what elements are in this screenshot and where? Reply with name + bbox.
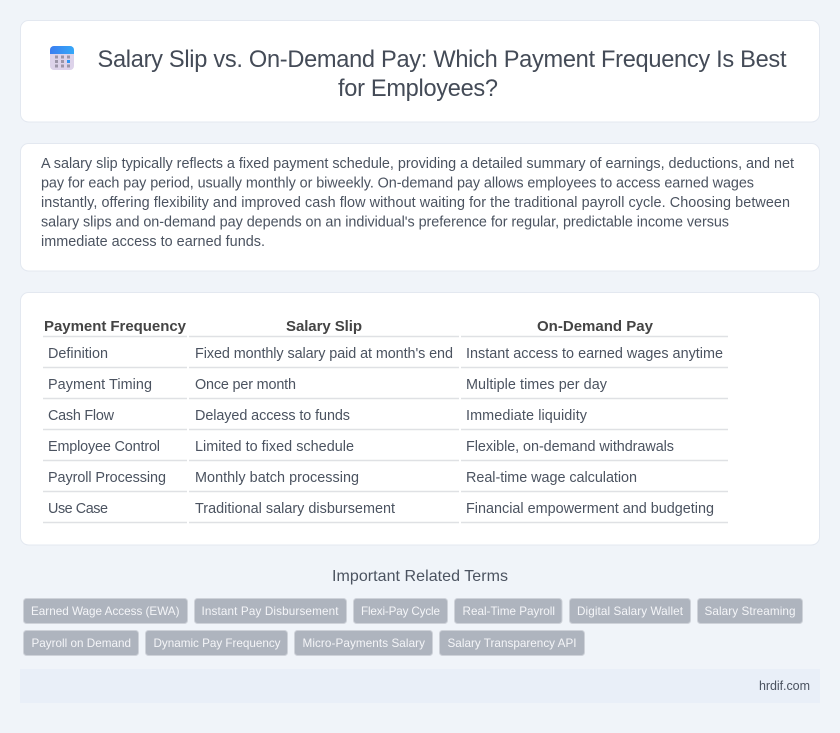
row: definition: Fixed monthly salary paid at month's end [195, 346, 453, 362]
tag: Salary Streaming [704, 605, 796, 618]
footer [20, 669, 820, 703]
panel: comparison table [20, 292, 820, 545]
table header: Payment Frequency [44, 318, 187, 335]
row: payroll processing: Payroll Processing [48, 470, 166, 486]
title: Salary Slip vs. On-Demand Pay: Which Payment Frequency Is Best [98, 47, 787, 73]
row: cash flow [48, 408, 588, 424]
panel: summary paragraph [20, 144, 820, 271]
row: use case: Financial empowerment and budgeting [466, 501, 714, 517]
row: use case: Use Case [48, 501, 108, 517]
tag: Digital Salary Wallet [577, 605, 684, 618]
row: employee control: Flexible, on-demand withdrawals [466, 439, 674, 455]
row: definition: Definition [48, 346, 108, 362]
title [98, 47, 787, 102]
tag: Payroll on Demand [32, 637, 131, 650]
tag [146, 630, 288, 656]
text block: summary [41, 156, 794, 250]
row: payroll processing: Monthly batch processing [195, 470, 359, 486]
tag: Salary Transparency API [448, 637, 576, 650]
heading: related terms: Important Related Terms [332, 568, 508, 585]
tag: Real-Time Payroll [462, 605, 555, 618]
table header [44, 318, 654, 335]
row: payroll processing [48, 470, 637, 486]
related term tags [24, 598, 802, 656]
row: definition: Instant access to earned wages anytime [466, 346, 723, 362]
text block: summary: immediate access to earned funds. [41, 234, 265, 250]
row: payment timing: Once per month [195, 377, 296, 393]
tag: Flexi-Pay Cycle [361, 605, 440, 618]
text block: summary: instantly, offering flexibility and improved cash flow without waiting for the traditional payroll cycle. Choosing between [41, 195, 790, 211]
panel: title card [20, 20, 820, 122]
title: for Employees? [338, 76, 498, 102]
text block: summary: pay for each pay period, usually monthly or biweekly. On-demand pay allows employees to access earned wages [41, 176, 754, 192]
tag: Micro-Payments Salary [302, 637, 425, 650]
tag [440, 630, 584, 656]
row: payroll processing: Real-time wage calculation [466, 470, 637, 486]
tag: Earned Wage Access (EWA) [31, 605, 180, 618]
footer: hrdif.com [759, 679, 810, 693]
tag [570, 598, 690, 624]
row: payment timing: Multiple times per day [466, 377, 608, 393]
tag [24, 598, 188, 624]
row: payment timing: Payment Timing [48, 377, 152, 393]
tag [294, 630, 432, 656]
tag [194, 598, 346, 624]
row: employee control: Limited to fixed schedule [195, 439, 354, 455]
row: cash flow: Delayed access to funds [195, 408, 350, 424]
row: employee control [48, 439, 674, 455]
row: use case: Traditional salary disbursement [195, 501, 395, 517]
row: cash flow: Cash Flow [48, 408, 115, 424]
row: use case [48, 501, 714, 517]
table header: Salary Slip [286, 318, 362, 335]
row: definition [48, 346, 723, 362]
icon: calendar [50, 46, 74, 70]
row: employee control: Employee Control [48, 439, 160, 455]
tag: Instant Pay Disbursement [202, 605, 339, 618]
text block: summary: salary slips and on-demand pay depends on an individual's preference for regular, predictable income versus [41, 214, 729, 230]
tag [454, 598, 562, 624]
tag [354, 598, 448, 624]
row: payment timing [48, 377, 608, 393]
tag: Dynamic Pay Frequency [154, 637, 281, 650]
table header: On-Demand Pay [537, 318, 654, 335]
text block: summary: A salary slip typically reflects a fixed payment schedule, providing a detailed summary of earnings, deductions, and net [41, 156, 794, 172]
row: cash flow: Immediate liquidity [466, 408, 588, 424]
tag [698, 598, 802, 624]
tag [24, 630, 138, 656]
